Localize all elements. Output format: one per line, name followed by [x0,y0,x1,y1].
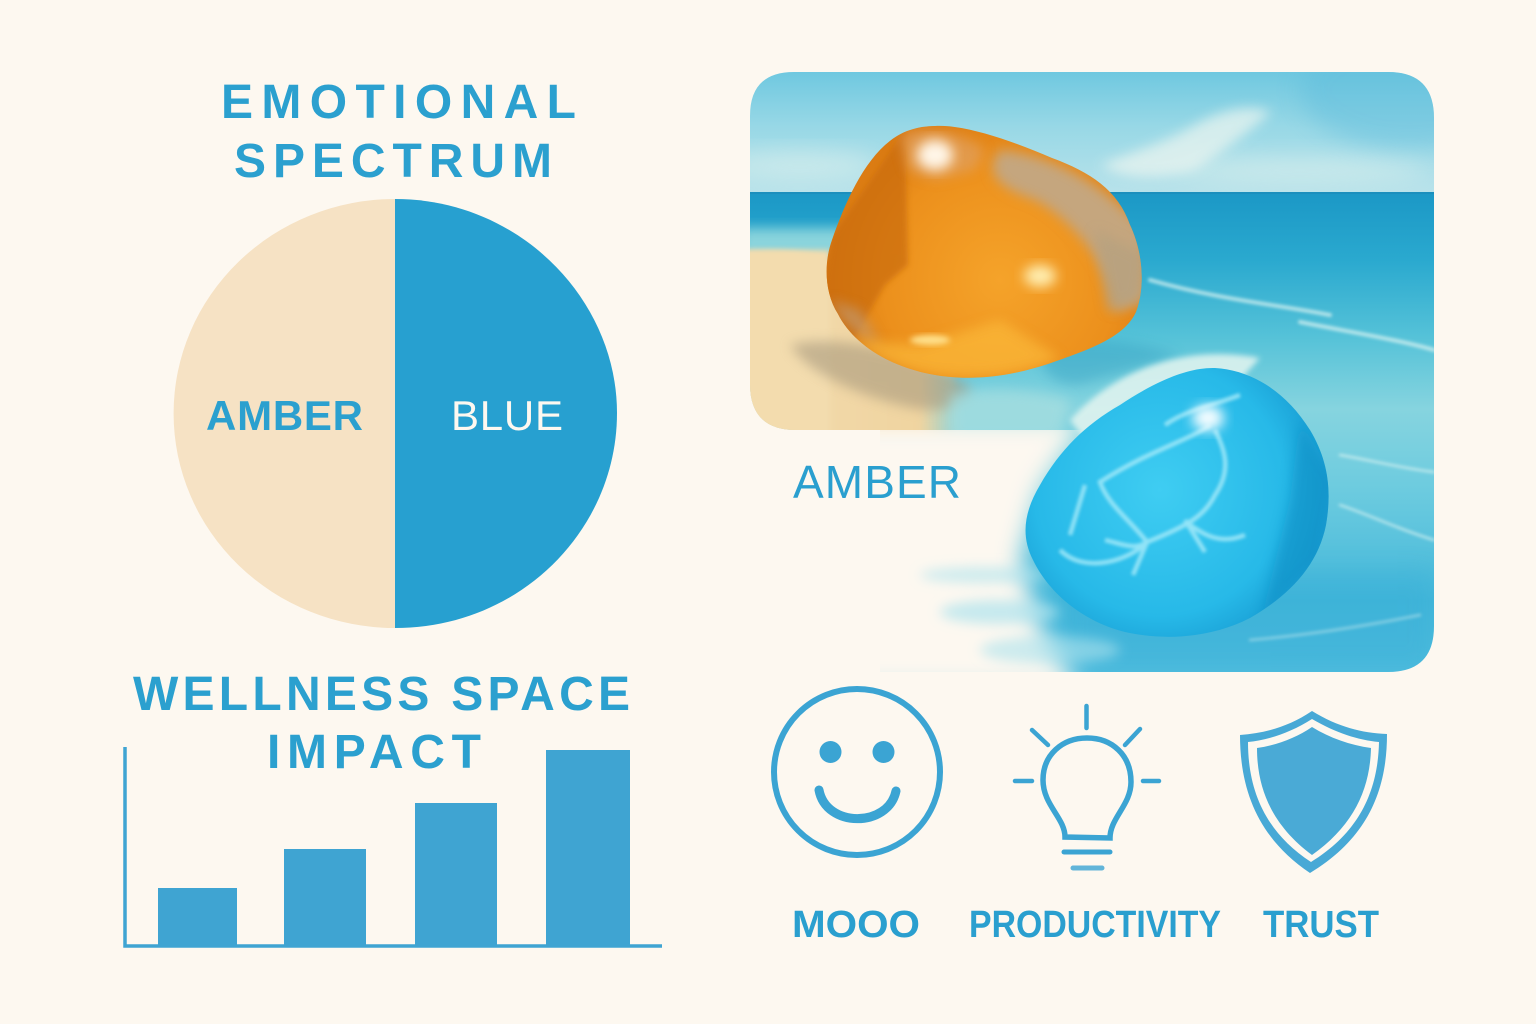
heading: wellness space impact [133,668,630,779]
title: emotional spectrum: EMOTIONAL [221,76,576,129]
pie chart: amber and blue [174,199,617,628]
bar chart [125,747,662,946]
title: emotional spectrum: SPECTRUM [234,135,552,188]
icon labels: PRODUCTIVITY [969,904,1221,946]
illustration: amber and blue stones on a beach [750,72,1434,672]
icon labels: MOOO [792,904,920,946]
icon labels [792,904,1379,946]
amber stone [820,120,1150,385]
soft cream fade over lower left of the scene [880,430,1124,672]
blue stone [1026,368,1329,637]
label: blue slice: BLUE [451,392,563,439]
icon: shield [1240,711,1387,873]
title: emotional spectrum [221,76,576,188]
label: amber slice: AMBER [206,392,363,439]
heading: wellness space impact: WELLNESS SPACE [133,668,630,721]
icon labels: TRUST [1263,904,1379,946]
label: amber: AMBER [793,456,961,508]
icon: smiley face [774,689,940,855]
icon: light bulb [1015,706,1159,868]
heading: wellness space impact: IMPACT [267,726,481,779]
